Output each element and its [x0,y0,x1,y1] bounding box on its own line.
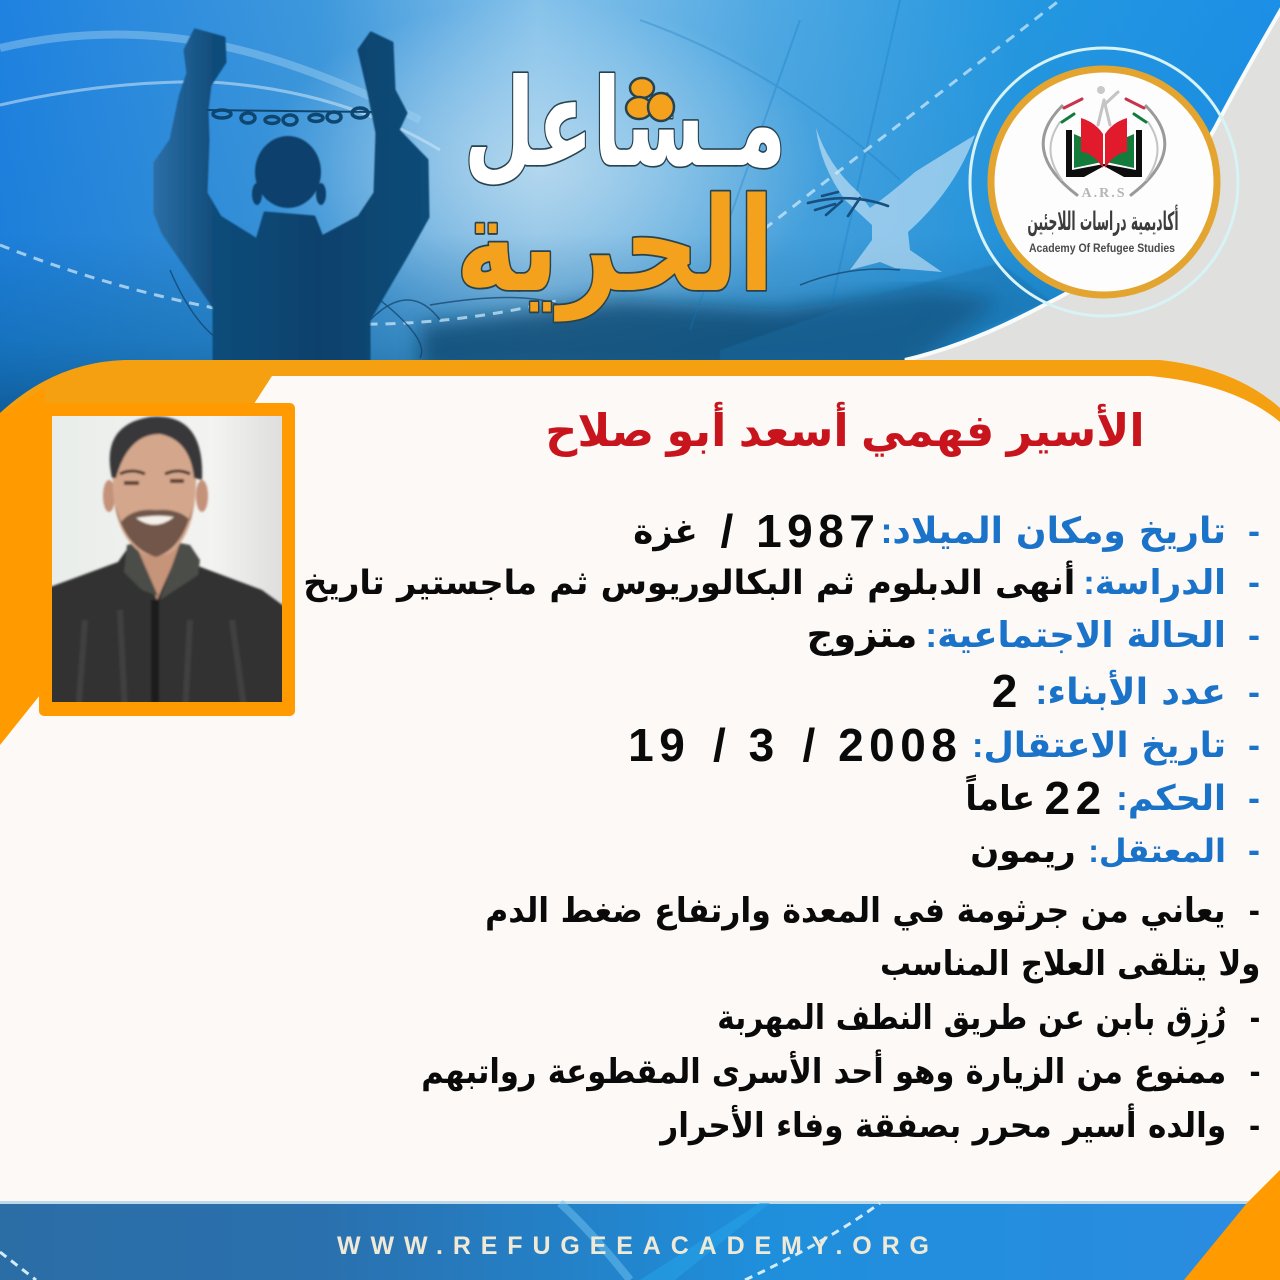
orange dots of the title [626,78,674,121]
logo arabic name: أكاديمية دراسات اللاجئين [1027,203,1179,236]
dove with olive branch [808,128,975,272]
grey corner with white curve [905,0,1280,425]
footer band [0,1201,1280,1280]
left orange tail [0,388,45,745]
orange band [0,360,1280,1280]
prisoner silhouette [155,30,428,360]
footer url: WWW.REFUGEEACADEMY.ORG [337,1232,929,1260]
note 4: والده أسير محرر بصفقة وفاء الأحرار [660,1107,1226,1145]
arrest date: 2008 [838,719,962,771]
arrest date: 19 [628,719,690,771]
sentence: الحكم: عاماً [965,779,1226,818]
sentence: - [1248,777,1260,818]
note 3: ممنوع من الزيارة وهو أحد الأسرى المقطوعة رواتبهم [421,1053,1226,1091]
children: 2 [992,665,1023,717]
banner background [0,0,1280,425]
marital status: - [1248,614,1260,655]
note 4: - [1249,1104,1260,1145]
logo [970,48,1238,316]
arrest date: 3 [749,719,780,771]
note 3: - [1249,1050,1260,1091]
sentence [965,772,1260,824]
logo initials: A.R.S [1081,186,1127,201]
study: - [1248,561,1260,602]
barbed wire [170,269,900,358]
children: - [1248,671,1260,712]
calligraphic title: الحرية [456,170,774,322]
note 1 line 1: - [1249,889,1260,930]
birth: تاريخ ومكان الميلاد: / غزة [633,505,1226,557]
sentence: 22 [1045,772,1107,824]
marital status: الحالة الاجتماعية:متزوج [807,614,1226,655]
photo frame [39,403,295,716]
dashed route lines [0,0,1060,324]
birth: - [1248,510,1260,551]
prison: - [1248,829,1260,870]
arrest date: - [1248,724,1260,765]
footer orange corner [1184,1170,1280,1280]
note 1 line 2: ولا يتلقى العلاج المناسب [880,945,1260,983]
logo book [1066,118,1142,177]
logo wreath [1043,86,1165,195]
white content panel [0,376,1280,1210]
title name: الأسير فهمي أسعد أبو صلاح [545,407,1145,456]
portrait [52,416,282,702]
arrest date: تاريخ الاعتقال: / / [713,719,1226,771]
calligraphic title: مـشاعل [464,54,786,194]
logo english name: Academy Of Refugee Studies [1029,243,1175,255]
study: الدراسة:أنهى الدبلوم ثم البكالوريوس ثم ماجستير تاريخ [303,564,1226,602]
prison: المعتقل: ريمون [970,832,1226,870]
children: عدد الأبناء: [1035,671,1226,712]
note 1 line 1: يعاني من جرثومة في المعدة وارتفاع ضغط الدم [485,892,1226,930]
chain [207,108,372,125]
birth: 1987 [756,505,880,557]
calligraphic title [456,54,786,322]
children [992,665,1260,717]
note 2: - [1250,996,1260,1037]
note 2: رُزِق بابن عن طريق النطف المهربة [717,999,1226,1037]
